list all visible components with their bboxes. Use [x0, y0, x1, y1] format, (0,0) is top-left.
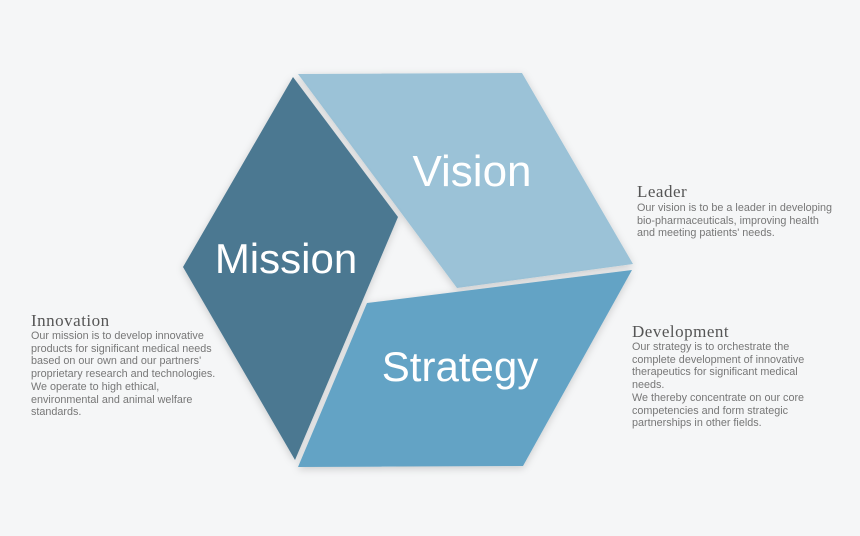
- body: innovation: [31, 330, 215, 418]
- shape: mission: Mission: [215, 235, 357, 282]
- body: innovation: proprietary research and technologies.: [31, 368, 215, 380]
- body: development: therapeutics for significant medical: [632, 366, 798, 378]
- body: innovation: environmental and animal welfare: [31, 394, 192, 406]
- body: leader: [637, 202, 832, 239]
- body: development: complete development of innovative: [632, 354, 804, 366]
- shape: vision: Vision: [412, 147, 532, 196]
- text block: development: [632, 322, 804, 429]
- body: development: partnerships in other fields.: [632, 417, 762, 429]
- body: development: competencies and form strategic: [632, 405, 788, 417]
- shape: strategy: Strategy: [382, 343, 538, 390]
- heading: development: Development: [632, 322, 729, 341]
- heading: innovation: Innovation: [31, 311, 110, 330]
- text block: leader: [637, 182, 832, 239]
- body: innovation: Our mission is to develop innovative: [31, 330, 204, 342]
- body: development: needs.: [632, 379, 664, 391]
- shape: mission: [183, 77, 398, 460]
- body: development: Our strategy is to orchestrate the: [632, 341, 789, 353]
- body: leader: Our vision is to be a leader in developing: [637, 202, 832, 214]
- shape: strategy: [298, 270, 632, 467]
- body: leader: and meeting patients' needs.: [637, 227, 775, 239]
- body: innovation: products for significant medical needs: [31, 343, 212, 355]
- shape: vision: [298, 73, 633, 288]
- body: development: [632, 341, 804, 429]
- body: development: We thereby concentrate on our core: [632, 392, 804, 404]
- body: leader: bio-pharmaceuticals, improving health: [637, 215, 819, 227]
- text block: innovation: [31, 311, 215, 418]
- body: innovation: We operate to high ethical,: [31, 381, 159, 393]
- body: innovation: standards.: [31, 406, 81, 418]
- body: innovation: based on our own and our partners': [31, 355, 201, 367]
- heading: leader: Leader: [637, 182, 687, 201]
